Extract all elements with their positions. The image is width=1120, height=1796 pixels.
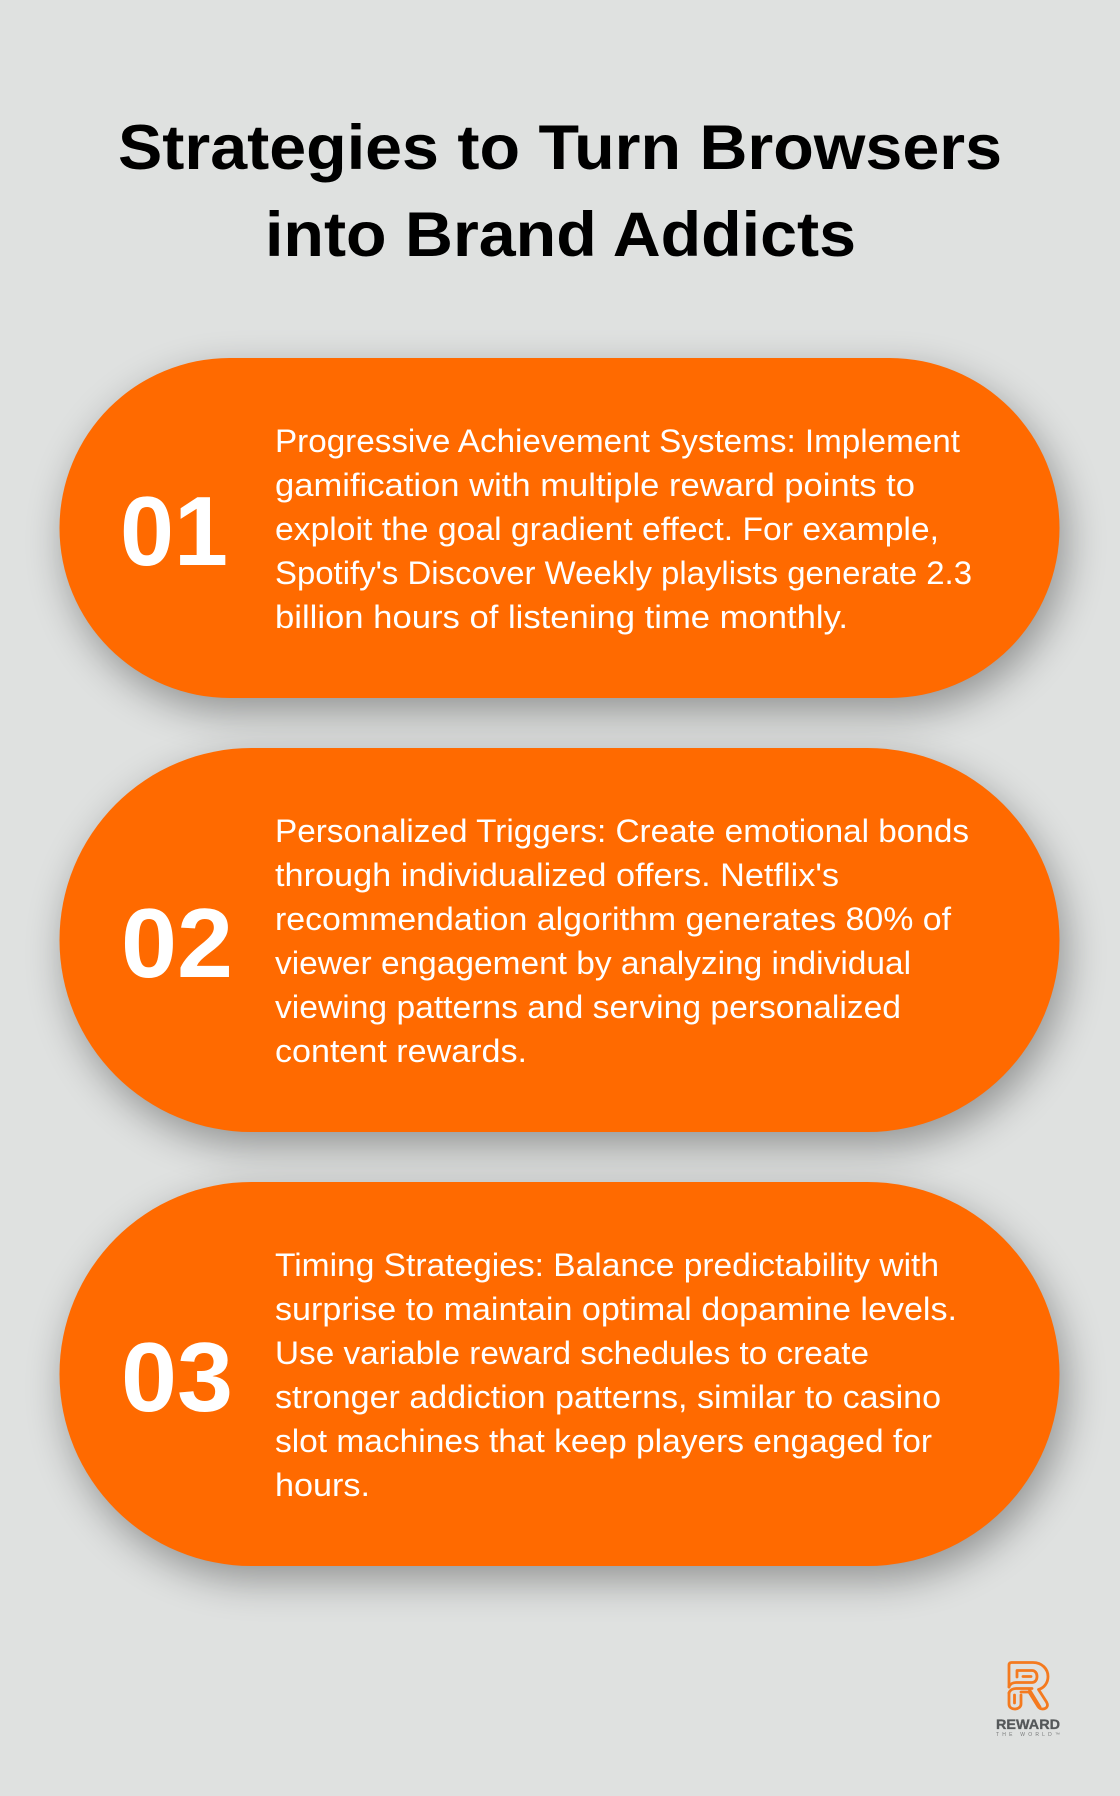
text block 02: through individualized offers. Netflix's — [275, 857, 839, 893]
title: Strategies to Turn Browsers — [118, 113, 1002, 183]
logo tagline: THE WORLD™ — [996, 1732, 1060, 1738]
number 02: 02 — [121, 888, 233, 998]
title: into Brand Addicts — [265, 200, 856, 270]
text block 02: content rewards. — [275, 1033, 527, 1069]
panel: step 03 timing strategies — [60, 1182, 1066, 1580]
text block 02: viewing patterns and serving personalized — [275, 989, 901, 1025]
pill background 01 — [60, 358, 1060, 698]
text block 03: stronger addiction patterns, similar to casino — [275, 1379, 941, 1415]
icon: orange R — [1009, 1662, 1048, 1709]
panel: step 02 personalized triggers — [60, 748, 1066, 1146]
text block 02 — [275, 813, 969, 1069]
number 01: 01 — [120, 476, 228, 586]
pill background 02 — [60, 748, 1060, 1132]
logo: Reward the World — [996, 1662, 1060, 1738]
text block 02: recommendation algorithm generates 80% of — [275, 901, 951, 937]
title — [118, 113, 1002, 270]
text block 03: Timing Strategies: Balance predictability with — [275, 1247, 939, 1283]
text block 03: slot machines that keep players engaged for — [275, 1423, 932, 1459]
number 03: 03 — [121, 1322, 233, 1432]
text block 03: hours. — [275, 1467, 370, 1503]
text block 01: gamification with multiple reward points to — [275, 467, 915, 503]
text block 01: exploit the goal gradient effect. For example, — [275, 511, 939, 547]
text block 03 — [275, 1247, 957, 1503]
text block 01: Progressive Achievement Systems: Implement — [275, 423, 960, 459]
logo wordmark: REWARD — [996, 1716, 1060, 1732]
panel: step 01 progressive achievement systems — [60, 358, 1066, 712]
text block 03: Use variable reward schedules to create — [275, 1335, 869, 1371]
text block 03: surprise to maintain optimal dopamine levels. — [275, 1291, 957, 1327]
text block 01: Spotify's Discover Weekly playlists generate 2.3 — [275, 555, 972, 591]
text block 01 — [275, 423, 972, 635]
text block 01: billion hours of listening time monthly. — [275, 599, 848, 635]
text block 02: viewer engagement by analyzing individual — [275, 945, 911, 981]
text block 02: Personalized Triggers: Create emotional bonds — [275, 813, 969, 849]
pill background 03 — [60, 1182, 1060, 1566]
